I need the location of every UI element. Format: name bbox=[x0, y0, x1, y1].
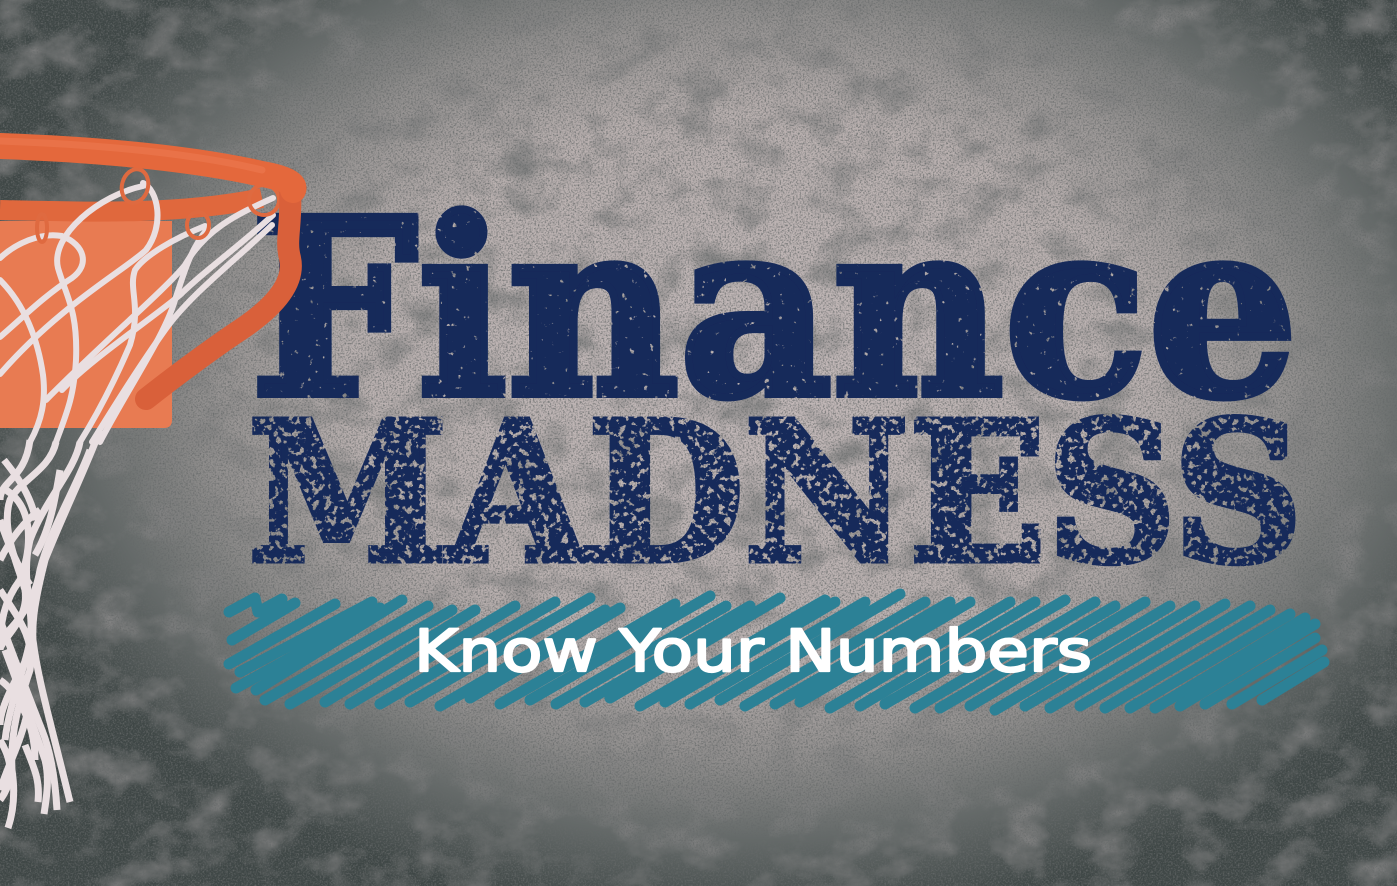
title: MADNESS: MADNESS bbox=[248, 381, 1303, 606]
hanging net strands, upper bbox=[0, 183, 273, 442]
teal scribble highlight bbox=[229, 594, 1324, 710]
tagline: Know Your Numbers: Know Your Numbers bbox=[414, 617, 1092, 685]
rings linking net to rim bbox=[37, 166, 279, 242]
hanging net strands, lower bbox=[0, 430, 100, 828]
net bbox=[0, 183, 273, 828]
title: Finance: Finance bbox=[250, 167, 1298, 452]
front rim of hoop bbox=[0, 141, 293, 399]
backboard bbox=[0, 221, 172, 428]
back rim of hoop bbox=[0, 198, 262, 212]
